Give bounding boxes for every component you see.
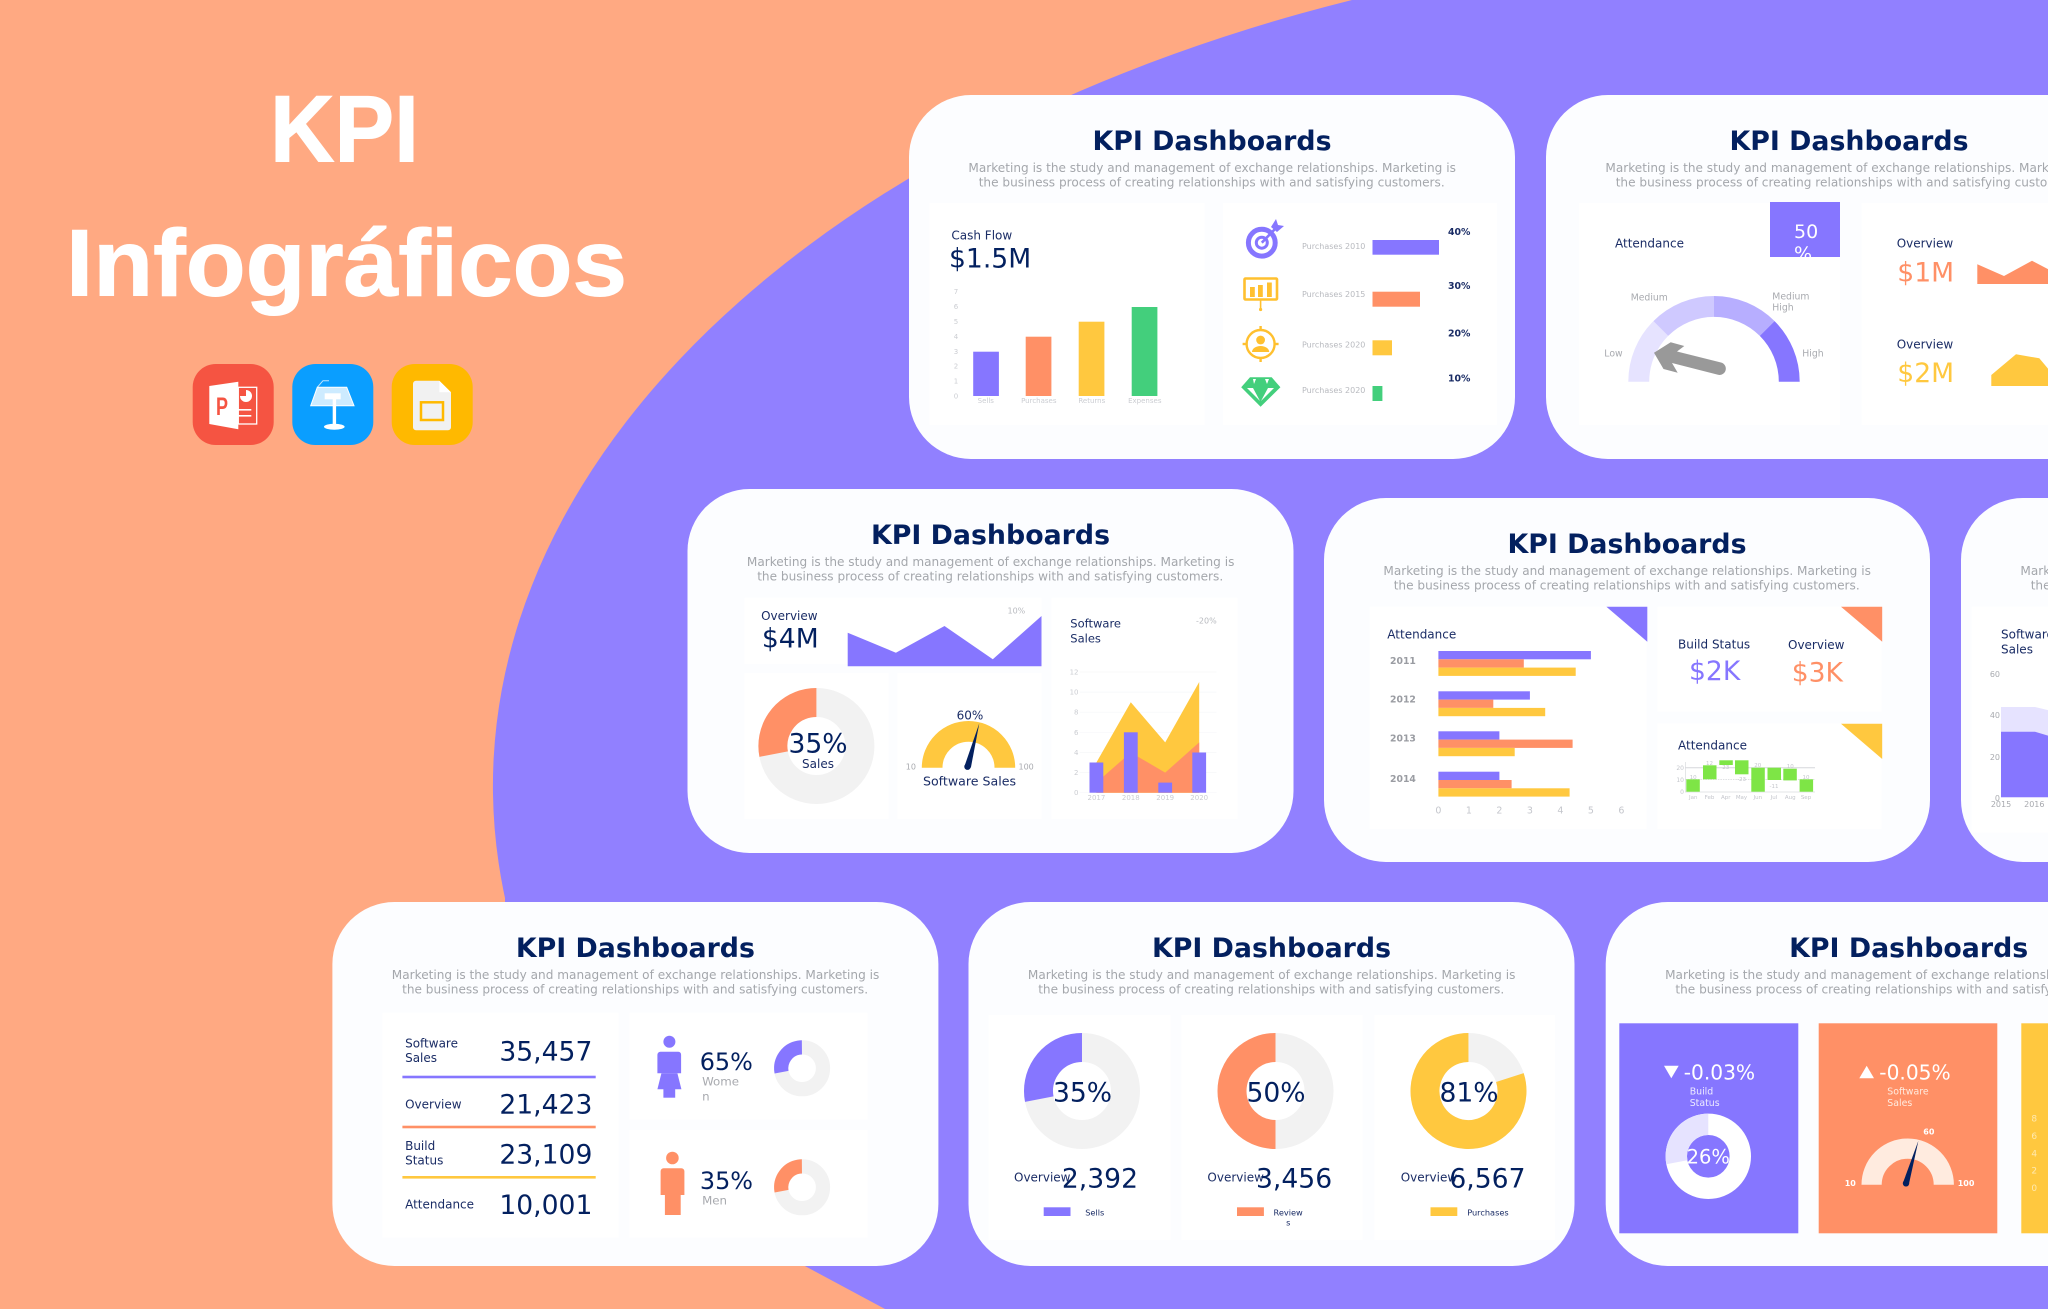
panel: purchases by year: 10% (1448, 374, 1471, 385)
panel: purchases donut: 81% (1439, 1078, 1499, 1109)
panel: sells donut (989, 1015, 1170, 1240)
icon: man (661, 1152, 684, 1215)
panel: men share: Men (702, 1194, 727, 1208)
panel: purchases by year: Purchases 2020 (1302, 386, 1365, 395)
panel: cash flow bar chart: 3 (954, 348, 958, 356)
panel: cash flow bar chart: Expenses (1128, 397, 1162, 405)
panel: attendance gauge (1579, 202, 1840, 425)
card: partial software sales dashboard (1961, 498, 2048, 862)
panel: attendance waterfall: 10 (1690, 775, 1697, 781)
heading: KPI Dashboards (1092, 126, 1332, 157)
panel: build status tile (1619, 1023, 1798, 1233)
panel: cash flow bar chart: Purchases (1021, 397, 1057, 405)
panel: attendance waterfall: 20 (1676, 765, 1684, 772)
panel: attendance horizontal bars: 2014 (1390, 774, 1416, 785)
description (1028, 967, 1515, 996)
panel: attendance waterfall: Jul (1770, 795, 1778, 801)
panel: overview values: $2M (1897, 358, 1954, 389)
panel: purchases by year: Purchases 2015 (1302, 290, 1365, 299)
panel: sales donut: Sales (802, 757, 834, 771)
card: overview and software sales dashboard (688, 489, 1294, 853)
panel: overview values: Overview (1897, 237, 1953, 251)
panel: reviews donut: Overview (1207, 1171, 1264, 1185)
panel: software sales combo chart: 2017 (1087, 794, 1105, 802)
panel: attendance waterfall: 10 (1802, 775, 1810, 781)
panel: software sales tile: -0.05% (1879, 1060, 1951, 1084)
panel: yellow tile: 6 (2031, 1132, 2037, 1142)
panel: attendance gauge: High (1772, 303, 1794, 314)
panel: attendance waterfall: 0 (1680, 789, 1684, 796)
panel: build status tile: 26% (1687, 1145, 1730, 1168)
card: three donuts dashboard (968, 902, 1574, 1266)
icon: presentation board (1244, 278, 1277, 311)
panel: build status and overview: Build Status (1678, 637, 1750, 651)
panel: attendance horizontal bars: 2013 (1390, 733, 1416, 744)
panel: attendance horizontal bars: 4 (1557, 806, 1563, 817)
description: Marketing is the study and management of exchange relationships. Marketing is (392, 967, 879, 982)
panel: cash flow bar chart: 4 (954, 333, 959, 341)
description: the business process of creating relationships with and satisfying customers. (757, 568, 1223, 584)
panel: software sales combo chart: 2020 (1190, 794, 1208, 802)
panel: attendance gauge: Medium (1772, 291, 1809, 302)
panel: purchases donut: Purchases (1467, 1207, 1509, 1217)
panel: build status tile: Status (1690, 1098, 1720, 1109)
panel: metric list: Build (405, 1139, 435, 1153)
panel: attendance waterfall: -11 (1770, 784, 1778, 790)
panel: attendance horizontal bars: 5 (1588, 806, 1594, 817)
panel: attendance horizontal bars: 6 (1618, 806, 1624, 817)
description: Marketing is the study and management of exchange relationships. Marketing is (1028, 967, 1515, 982)
description (392, 967, 879, 996)
panel: metric list: 23,109 (499, 1140, 592, 1171)
panel: software sales combo chart: Software (1070, 617, 1121, 631)
panel: reviews donut: s (1286, 1217, 1290, 1227)
panel: attendance gauge: High (1802, 349, 1824, 360)
icon: customer target (1243, 326, 1279, 362)
panel: purchases donut: Overview (1401, 1171, 1457, 1185)
panel: cash flow bar chart: 6 (954, 303, 959, 311)
panel: attendance waterfall: Feb (1705, 795, 1715, 801)
description: the business process of creating relationships with and satisfying customers. (979, 174, 1445, 190)
panel: software sales tile: 10 (1845, 1179, 1856, 1188)
panel: attendance gauge: % (1794, 243, 1812, 265)
panel: overview values: $1M (1897, 258, 1954, 289)
panel: software sales gauge: Software Sales (923, 774, 1016, 789)
panel: software sales tile: 60 (1923, 1127, 1935, 1136)
panel: software sales stacked area: 2015 (1991, 800, 2011, 809)
panel: metric list: Overview (405, 1097, 462, 1111)
description (968, 160, 1456, 190)
panel: sells donut: Sells (1085, 1207, 1104, 1217)
panel: software sales stacked area: 20 (1990, 753, 2000, 762)
panel: purchases by year: Purchases 2020 (1302, 341, 1365, 350)
panel: attendance gauge: Low (1604, 349, 1623, 360)
panel: purchases by year (1223, 203, 1497, 425)
description (2020, 563, 2048, 592)
card: attendance gauge dashboard (1546, 95, 2048, 459)
panel: attendance waterfall: 23 (1722, 765, 1730, 771)
panel: attendance horizontal bars: 1 (1466, 806, 1472, 817)
panel: metric list: Status (405, 1154, 443, 1168)
panel: cash flow bar chart: 1 (954, 378, 958, 386)
panel: software sales combo chart: 8 (1074, 709, 1078, 717)
panel: cash flow bar chart (930, 203, 1205, 425)
panel: attendance waterfall: May (1736, 795, 1748, 801)
panel: attendance horizontal bars: 2 (1496, 806, 1502, 817)
panel: software sales combo chart: Sales (1070, 631, 1101, 645)
panel: metric list: 35,457 (499, 1037, 592, 1068)
icon: Keynote (292, 364, 373, 445)
panel: reviews donut: Review (1274, 1207, 1303, 1217)
panel: attendance waterfall: Jan (1688, 795, 1698, 801)
panel: overview values: Overview (1897, 337, 1953, 351)
panel: software sales tile: Software (1887, 1087, 1929, 1098)
panel: software sales combo chart: 2019 (1156, 794, 1174, 802)
panel: metric list: Software (405, 1036, 458, 1050)
panel: software sales gauge: 100 (1018, 762, 1034, 771)
panel: attendance gauge: Attendance (1615, 237, 1684, 251)
panel: sales donut (744, 673, 888, 819)
panel: software sales gauge (898, 673, 1042, 819)
panel: build status tile: -0.03% (1684, 1060, 1755, 1084)
panel: build status and overview: $2K (1689, 656, 1741, 687)
panel: cash flow bar chart: Sells (978, 397, 994, 405)
panel: software sales stacked area: 2016 (2024, 800, 2044, 809)
panel: attendance waterfall: -23 (1737, 777, 1746, 783)
panel: cash flow bar chart: 5 (954, 318, 958, 326)
panel: sells donut: Overview (1014, 1171, 1071, 1185)
panel: software sales stacked area: Sales (2001, 642, 2033, 656)
heading: KPI Dashboards (1789, 933, 2028, 964)
panel: cash flow bar chart: 0 (954, 392, 958, 400)
panel: overview area: 10% (1008, 607, 1026, 616)
panel: software sales tile: Sales (1887, 1098, 1912, 1109)
panel: attendance waterfall: Apr (1721, 795, 1731, 801)
panel: attendance waterfall (1658, 723, 1882, 829)
icon: woman (657, 1036, 681, 1098)
heading: KPI Dashboards (1152, 933, 1391, 964)
panel: software sales combo chart: -20% (1196, 617, 1217, 626)
panel: overview area: $4M (762, 623, 819, 654)
panel: attendance horizontal bars (1370, 607, 1647, 829)
panel: software sales stacked area (1972, 607, 2048, 833)
panel: attendance horizontal bars: Attendance (1387, 627, 1456, 641)
panel: attendance waterfall: 10 (1787, 764, 1794, 770)
panel: attendance horizontal bars: 2012 (1390, 695, 1416, 706)
heading: KPI Dashboards (1729, 126, 1969, 157)
panel: software sales tile: 100 (1958, 1179, 1975, 1188)
background: purple blob (493, 0, 2048, 1309)
description: the business process of creating relationships with and satisfying customers. (1038, 981, 1504, 996)
panel: attendance waterfall: Aug (1785, 795, 1796, 801)
panel: cash flow bar chart: Returns (1078, 397, 1106, 405)
panel: attendance waterfall: 10 (1676, 777, 1684, 784)
panel: purchases donut: 6,567 (1449, 1163, 1526, 1194)
panel: build status and overview: Overview (1788, 638, 1845, 652)
panel: women share: n (702, 1089, 710, 1103)
panel: attendance gauge: 50 (1794, 221, 1818, 243)
panel: metric list: 10,001 (499, 1190, 592, 1221)
panel: software sales combo chart: 10 (1070, 689, 1078, 697)
description (747, 554, 1234, 584)
heading: KPI Dashboards (871, 520, 1110, 551)
panel: software sales combo chart: 4 (1074, 749, 1079, 757)
panel: metric list (382, 1013, 618, 1238)
panel: cash flow bar chart: $1.5M (949, 244, 1031, 275)
panel: attendance waterfall: 20 (1754, 763, 1762, 769)
panel: software sales combo chart: 2018 (1122, 794, 1140, 802)
icon: diamond (1241, 377, 1280, 407)
panel: attendance horizontal bars: 0 (1435, 806, 1441, 817)
panel: purchases by year: 40% (1448, 227, 1471, 238)
panel: purchases by year: Purchases 2010 (1302, 242, 1365, 251)
panel: reviews donut: 3,456 (1256, 1163, 1332, 1194)
heading: KPI Dashboards (516, 933, 755, 964)
main title: Infográficos (66, 211, 627, 317)
panel: software sales stacked area: 0 (1995, 794, 2000, 803)
icon: target (1248, 219, 1284, 256)
panel: software sales gauge: 10 (906, 762, 916, 771)
panel: metric list: Attendance (405, 1198, 474, 1212)
panel: reviews donut: 50% (1246, 1078, 1306, 1109)
description: the business process of creating relationships with and satisfying customers. (402, 981, 868, 996)
panel: attendance waterfall: Sep (1801, 795, 1812, 801)
panel: attendance gauge: Medium (1631, 293, 1668, 304)
panel: software sales combo chart: 2 (1074, 769, 1078, 777)
icon: Google Slides (392, 364, 473, 445)
panel: attendance waterfall: Jun (1753, 795, 1763, 801)
panel: software sales gauge: 60% (957, 708, 983, 722)
icon: PowerPoint: P (216, 392, 228, 421)
panel: yellow tile: 2 (2031, 1166, 2037, 1176)
card: colored tiles dashboard (1606, 902, 2048, 1266)
panel: software sales stacked area: 40 (1990, 711, 2000, 720)
panel: women share: Wome (702, 1075, 739, 1089)
description: Marketing is the study and management of exchange relationships. Marketing is (968, 160, 1456, 175)
panel: overview values (1862, 203, 2048, 425)
panel: software sales combo chart: 0 (1074, 789, 1078, 797)
panel: attendance horizontal bars: 3 (1527, 806, 1533, 817)
description: Marketing is the study and management of exchange relationships. Marketing is (1383, 563, 1871, 578)
panel: purchases donut (1374, 1015, 1555, 1240)
panel: purchases by year: 20% (1448, 329, 1471, 340)
description (1605, 160, 2048, 190)
icon: PowerPoint (193, 364, 274, 445)
panel: men share (629, 1130, 867, 1238)
main title: KPI (270, 77, 419, 183)
panel: attendance horizontal bars: 2011 (1390, 656, 1416, 667)
panel: software sales combo chart: 12 (1070, 668, 1078, 676)
card: sales totals dashboard (332, 902, 938, 1266)
panel: cash flow bar chart: Cash Flow (951, 228, 1012, 242)
panel: cash flow bar chart: 7 (954, 288, 958, 296)
panel: build status and overview (1658, 607, 1882, 712)
panel: attendance waterfall: Attendance (1678, 738, 1747, 752)
panel: women share (629, 1013, 867, 1120)
panel: attendance waterfall: 12 (1706, 761, 1713, 767)
panel: yellow tile: 0 (2031, 1184, 2037, 1194)
panel: men share: 35% (700, 1167, 753, 1195)
panel: overview area (744, 598, 1042, 666)
panel: sales donut: 35% (788, 729, 848, 760)
panel: software sales combo chart: 6 (1074, 729, 1079, 737)
panel: reviews donut (1182, 1015, 1362, 1240)
panel: purchases by year: 30% (1448, 281, 1471, 292)
panel: software sales stacked area: 60 (1990, 670, 2000, 679)
card: cash flow dashboard (909, 95, 1515, 459)
panel: build status and overview: $3K (1792, 658, 1844, 689)
description: the business process of creating relationships with and satisfying customers. (1394, 578, 1860, 592)
panel: metric list: 21,423 (499, 1089, 592, 1120)
heading: KPI Dashboards (1507, 529, 1747, 560)
panel: cash flow bar chart: 2 (954, 362, 958, 370)
card: attendance bars dashboard (1324, 498, 1930, 862)
description (1383, 563, 1871, 592)
panel: sells donut: 2,392 (1062, 1163, 1138, 1194)
panel: yellow tile (2021, 1023, 2048, 1233)
description: Marketing is the study and management of exchange relationships. Marketing is (747, 554, 1234, 569)
panel: build status tile: Build (1690, 1087, 1713, 1098)
panel: yellow tile: 8 (2031, 1114, 2037, 1124)
panel: software sales combo chart (1052, 598, 1238, 819)
main title (66, 77, 627, 317)
panel: overview area: Overview (761, 609, 818, 623)
description (1665, 967, 2048, 996)
panel: sells donut: 35% (1053, 1078, 1112, 1109)
panel: yellow tile: 4 (2031, 1149, 2037, 1159)
panel: metric list: Sales (405, 1051, 437, 1065)
panel: software sales tile (1819, 1023, 1997, 1233)
panel: women share: 65% (700, 1048, 753, 1076)
